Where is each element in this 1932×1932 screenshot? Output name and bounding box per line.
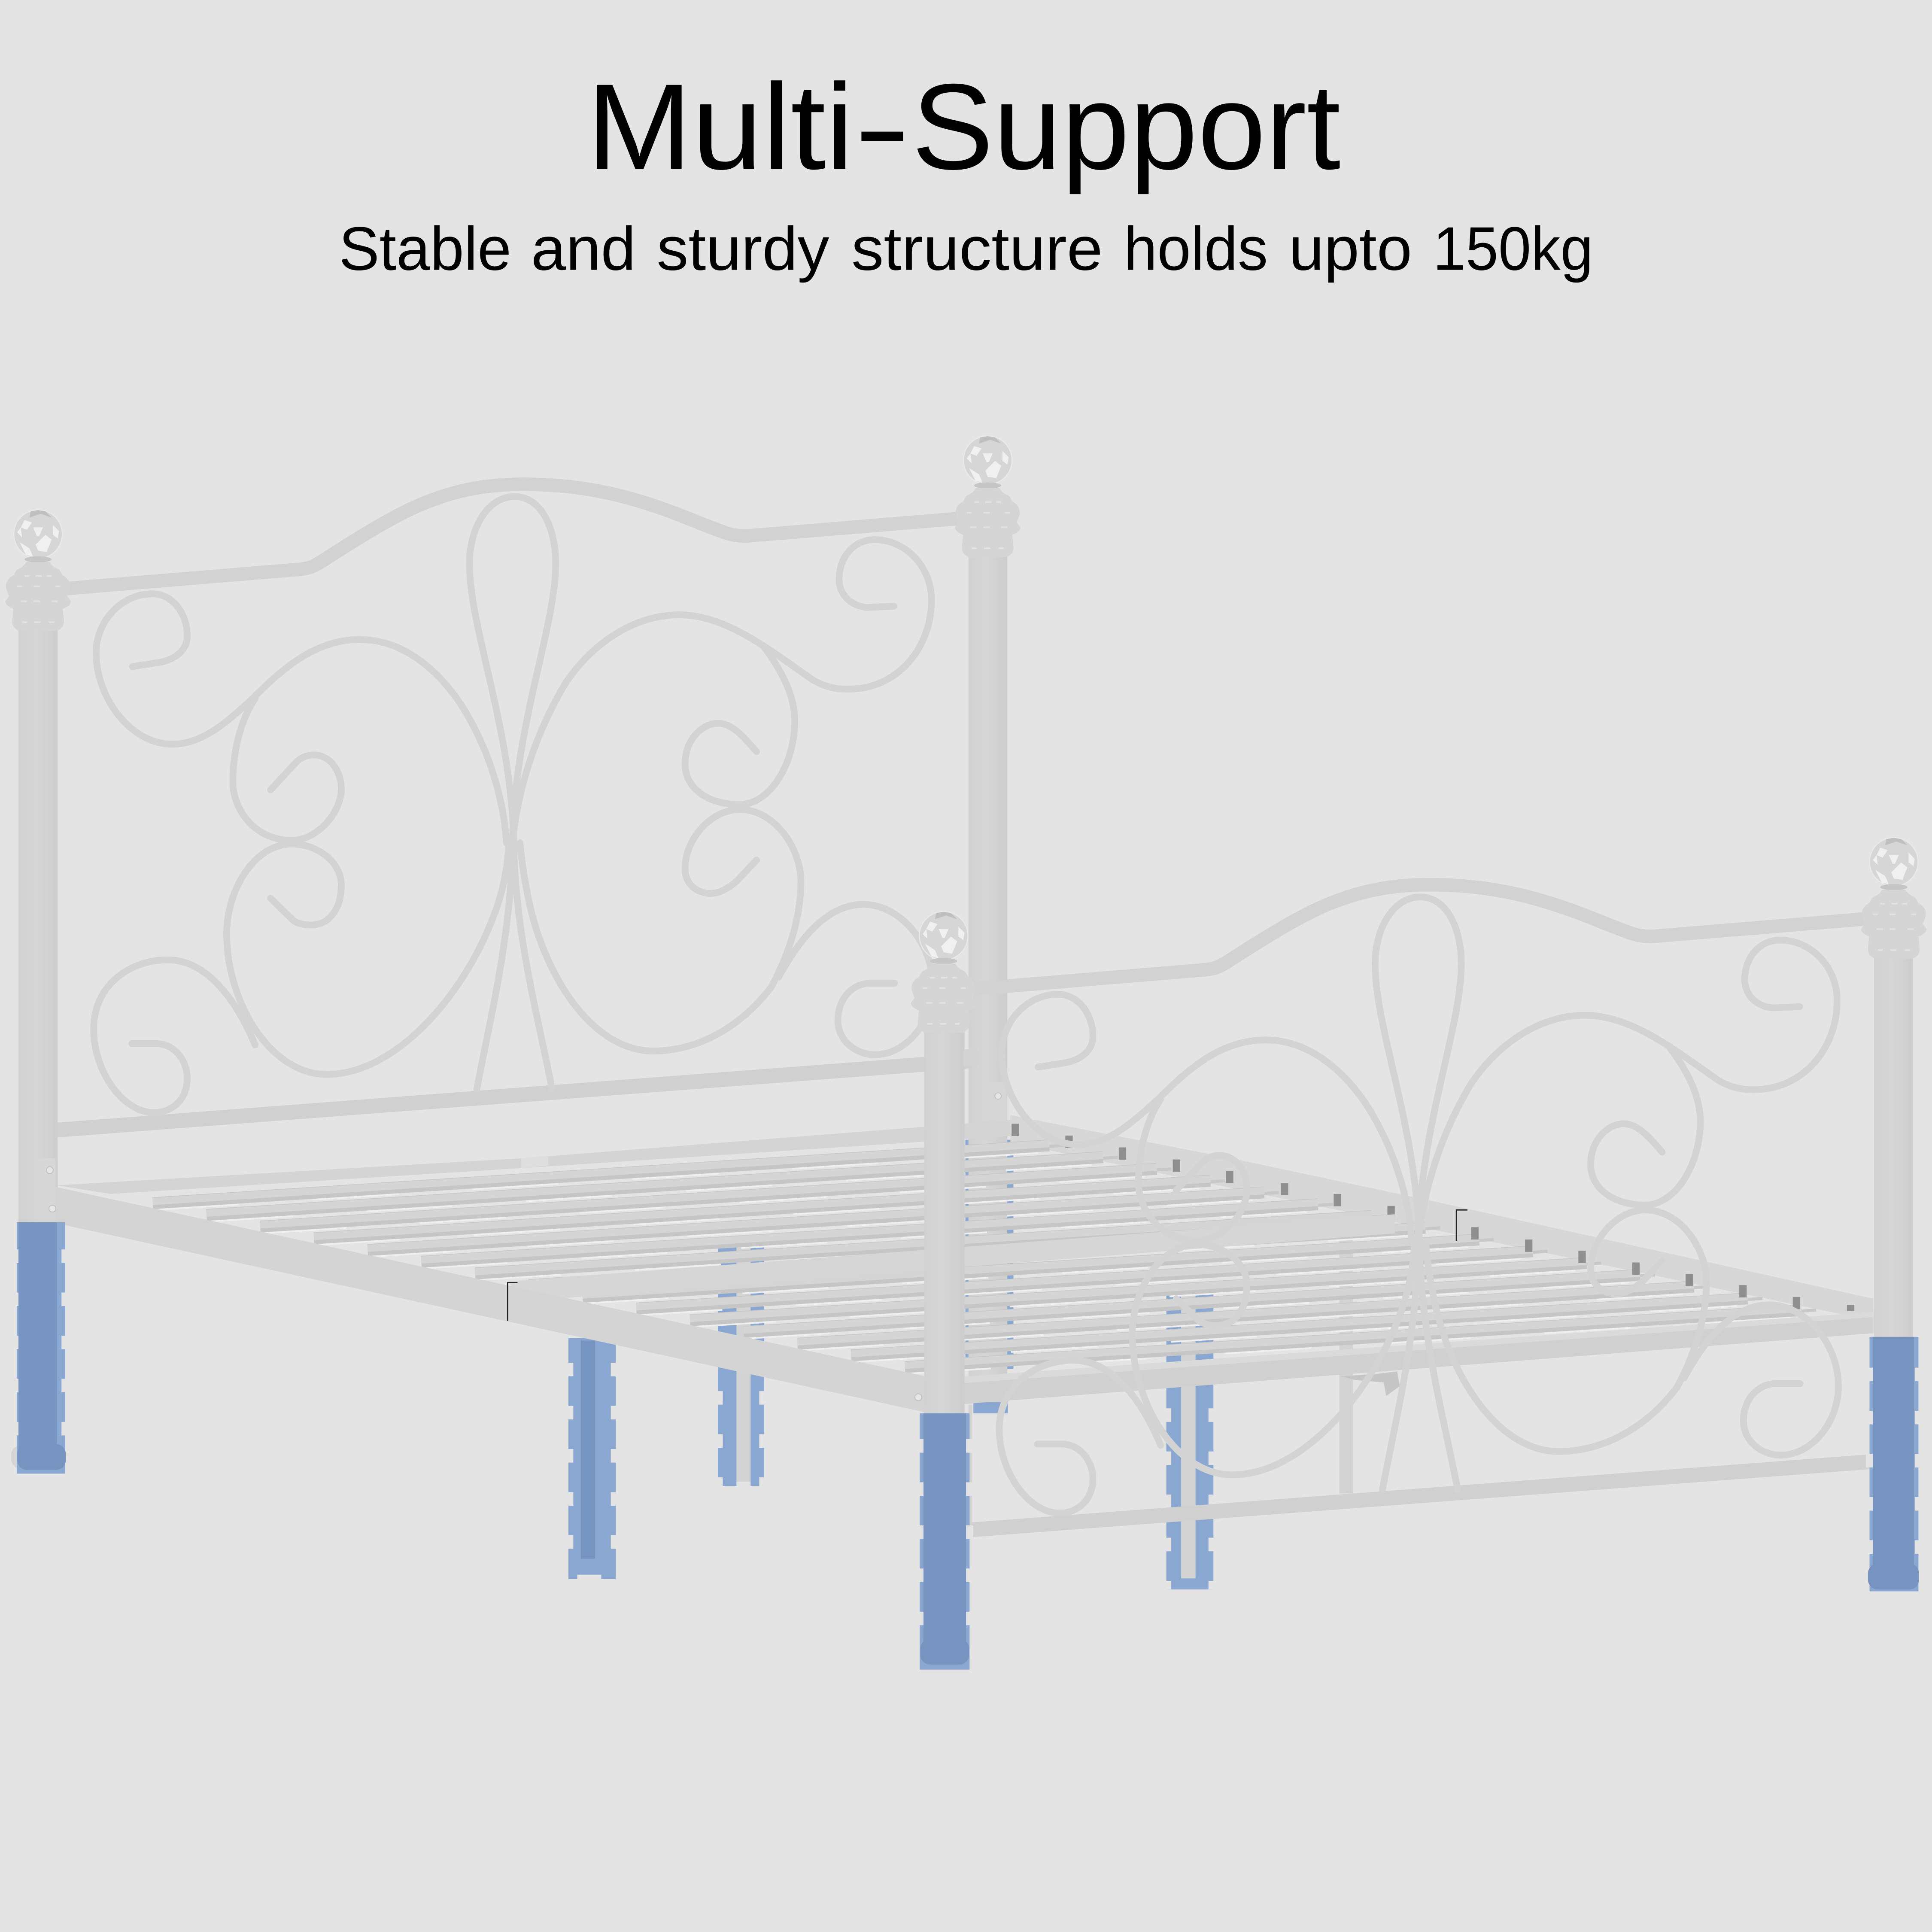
rear joint plate bbox=[521, 1156, 548, 1168]
subtitle: upto bbox=[1289, 215, 1412, 283]
finial: footboard right bbox=[1861, 838, 1926, 959]
middle cross rail bbox=[507, 1214, 1395, 1301]
highlighted support leg: foot left bbox=[920, 1413, 969, 1670]
back support legs bbox=[568, 1140, 1353, 1589]
centre bracket bbox=[1340, 1371, 1400, 1396]
near side rail bbox=[41, 1184, 924, 1412]
headboard right post bbox=[969, 556, 1007, 1402]
title: Multi bbox=[586, 59, 854, 195]
headboard ornament bbox=[59, 484, 970, 1130]
subtitle: holds bbox=[1124, 215, 1268, 283]
leg: rear centre left bbox=[568, 1338, 616, 1580]
rail joint marks bbox=[507, 1210, 1467, 1321]
head post lower sliver bbox=[969, 1405, 972, 1523]
subtitle: structure bbox=[851, 215, 1103, 283]
subtitle: 150kg bbox=[1433, 215, 1593, 283]
subtitle: sturdy bbox=[657, 215, 829, 283]
finial: footboard left bbox=[911, 911, 976, 1033]
highlighted support leg: foot right bbox=[1868, 1337, 1919, 1591]
highlighted support leg: head left bbox=[11, 1222, 66, 1473]
corner bolts bbox=[46, 1167, 922, 1400]
head cross rail bbox=[57, 1120, 1010, 1194]
subtitle: Stable bbox=[339, 215, 511, 283]
far side rail bbox=[1010, 1115, 1874, 1321]
footboard bbox=[911, 838, 1926, 1530]
title: Support bbox=[912, 59, 1341, 195]
head left bracket bbox=[37, 1158, 55, 1247]
title: - bbox=[854, 59, 911, 195]
foot rail bbox=[924, 1312, 1874, 1407]
subtitle: and bbox=[531, 215, 636, 283]
leg: head side behind post bbox=[966, 1140, 1013, 1413]
leg: front centre bbox=[1166, 1293, 1213, 1589]
footboard left post bbox=[924, 1030, 965, 1417]
slats bbox=[153, 1144, 1816, 1374]
slat end tabs bbox=[1012, 1124, 1854, 1311]
leg: rear centre bbox=[718, 1245, 764, 1487]
footboard ornament bbox=[965, 885, 1875, 1530]
platform slats and rails bbox=[37, 1115, 1874, 1412]
headboard right bracket bbox=[984, 1082, 1007, 1127]
finial: headboard left bbox=[5, 510, 71, 631]
centre post bbox=[1340, 1232, 1353, 1493]
footboard stub bbox=[963, 1049, 977, 1066]
bolt: head right bbox=[995, 1093, 1001, 1099]
headboard left post bbox=[18, 630, 58, 1226]
headboard bbox=[5, 436, 1021, 1402]
footboard right post bbox=[1874, 956, 1913, 1340]
finial: headboard right bbox=[955, 436, 1021, 557]
